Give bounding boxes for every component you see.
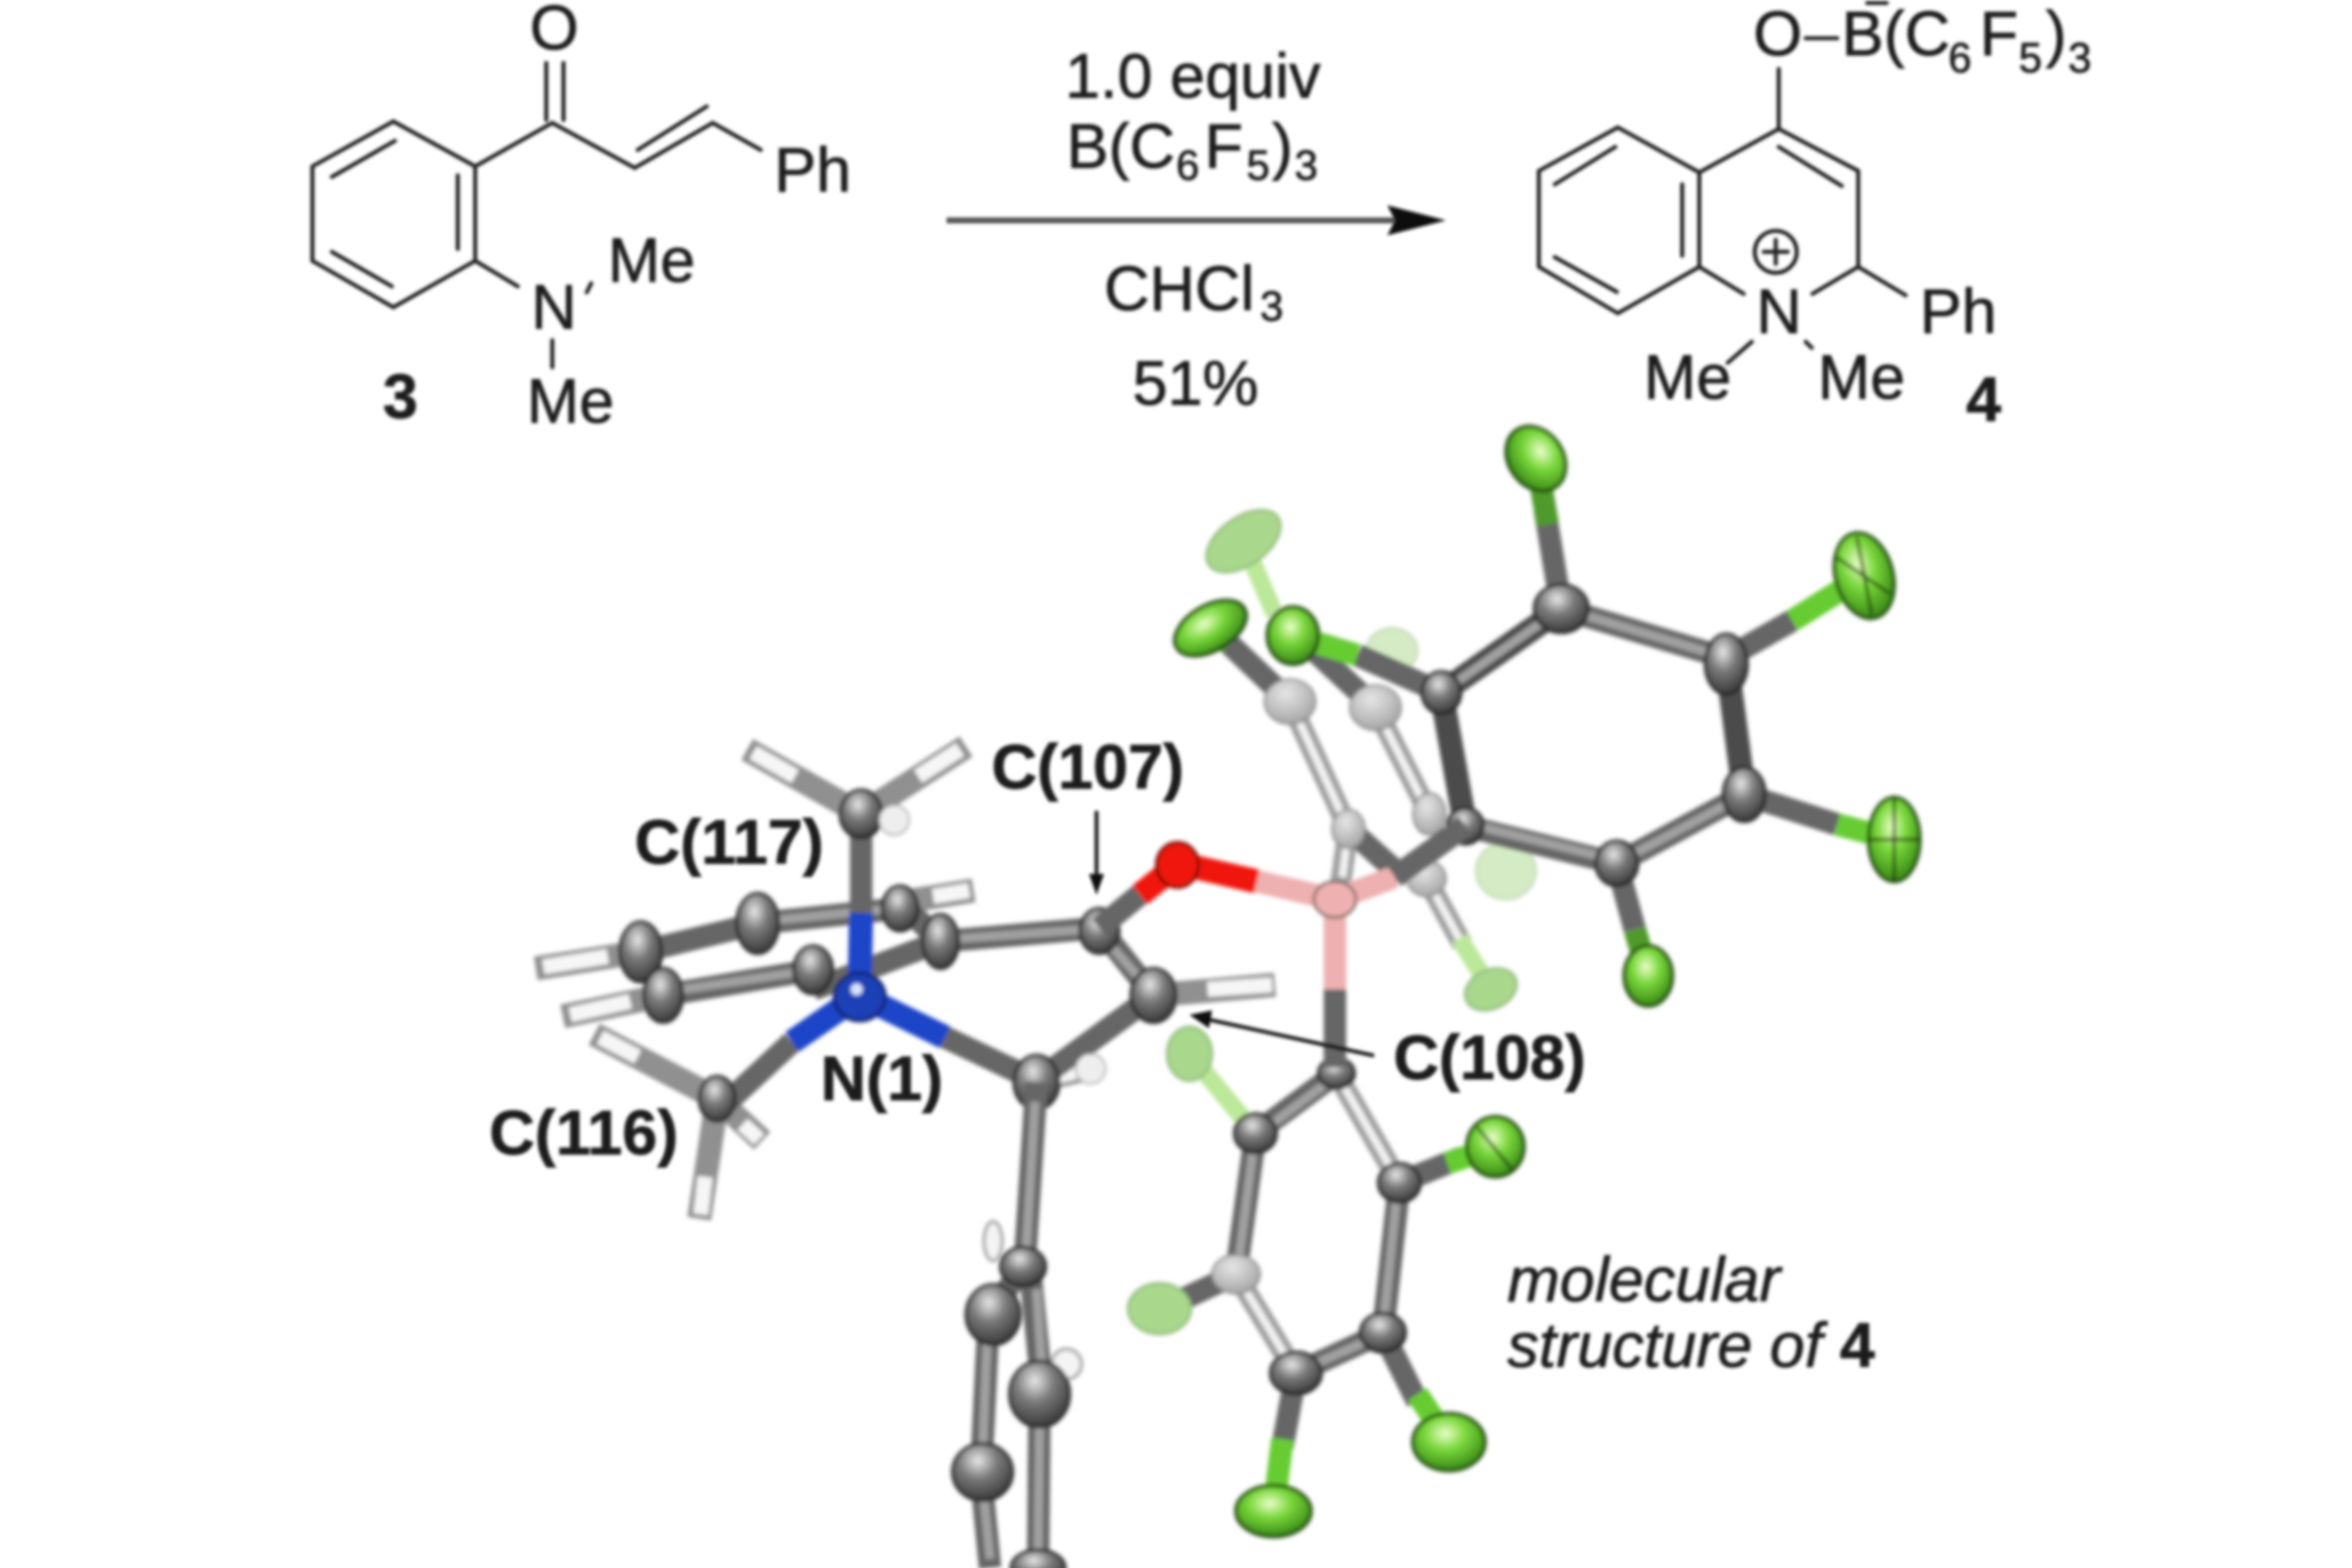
C-phenyl ring: [953, 1082, 1081, 1568]
compound 4 structure: [1538, 0, 2091, 435]
borate group label: F: [1980, 0, 2018, 70]
methyl label right: Me: [1817, 343, 1905, 413]
nitrogen label: N: [532, 273, 577, 342]
solvent: CHCl: [1104, 255, 1255, 325]
label C(108): C(108): [1393, 1023, 1586, 1093]
compound number 3: 3: [382, 362, 418, 432]
compound 4 bonds: [1538, 3, 1906, 362]
reagent formula: F: [1205, 112, 1243, 182]
back pentafluorophenyl ring: [1165, 498, 1535, 1018]
compound 3 bonds: [313, 63, 761, 367]
methyl label left: Me: [1644, 343, 1732, 413]
atom labels: [489, 733, 1875, 1381]
front pentafluorophenyl ring: [1268, 415, 1920, 1006]
methyl label upper: Me: [607, 226, 695, 296]
N-methyl groups and nitrogen: [594, 747, 966, 1219]
label C(107): C(107): [992, 733, 1184, 802]
borate group label: B(C: [1842, 0, 1950, 70]
borate group label: ): [2045, 0, 2066, 70]
dihydropyridine ring: [923, 908, 1275, 1109]
arrow to C(108): [1190, 1010, 1372, 1055]
label N(1): N(1): [821, 1044, 943, 1114]
label C(116): C(116): [489, 1098, 678, 1168]
molecular structure model: [536, 415, 1920, 1568]
phenyl label: Ph: [1920, 277, 1997, 346]
reagent formula: 6: [1176, 142, 1199, 189]
caption: [1508, 1245, 1875, 1381]
label C(117): C(117): [634, 807, 823, 877]
methyl label lower: Me: [527, 367, 614, 437]
caption: molecular: [1508, 1245, 1783, 1315]
compound number 4: 4: [1967, 365, 2001, 435]
reagent formula: 5: [1247, 142, 1270, 189]
carbonyl oxygen and boron linkage: [1099, 826, 1466, 1067]
compound 3 structure: [313, 0, 851, 437]
reaction scheme: [313, 0, 2091, 437]
caption: structure of 4: [1508, 1311, 1875, 1381]
lower pentafluorophenyl ring: [1128, 1026, 1524, 1536]
nitrogen label: N: [1757, 277, 1801, 346]
reagent formula: 3: [1294, 142, 1317, 189]
oxygen label: O: [1754, 0, 1802, 70]
reagent formula: B(C: [1066, 112, 1175, 182]
borate group label: 5: [2018, 34, 2042, 81]
reagent amount: 1.0 equiv: [1065, 42, 1321, 112]
reagent formula: ): [1272, 112, 1293, 182]
benzo ring of quinoline: [536, 886, 974, 1022]
borate group label: 6: [1948, 34, 1972, 81]
reaction arrow: [947, 205, 1446, 235]
reaction conditions and arrow: [947, 42, 1446, 419]
solvent: 3: [1260, 283, 1284, 330]
phenyl label: Ph: [774, 136, 851, 206]
arrow to C(107): [1089, 812, 1104, 895]
yield: 51%: [1132, 349, 1259, 419]
borate group label: 3: [2068, 34, 2091, 81]
positive charge symbol: [1755, 231, 1796, 273]
